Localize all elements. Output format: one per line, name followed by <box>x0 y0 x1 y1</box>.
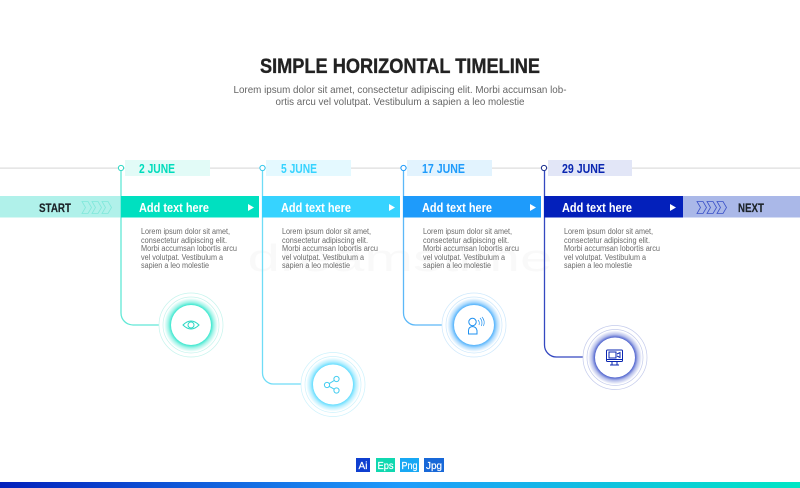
header bar: Add text here <box>139 200 209 215</box>
description: Lorem ipsum dolor sit amet, <box>282 227 371 236</box>
badge: Jpg: Jpg <box>426 461 442 472</box>
date tag <box>407 160 492 176</box>
node <box>260 165 265 171</box>
icon circle: monitor <box>583 326 647 390</box>
description <box>423 227 519 270</box>
next bar: NEXT <box>738 201 765 215</box>
subtitle <box>234 84 567 108</box>
header bar: Add text here <box>422 200 492 215</box>
subtitle: Lorem ipsum dolor sit amet, consectetur adipiscing elit. Morbi accumsan lob- <box>234 84 567 96</box>
description: sapien a leo molestie <box>423 261 491 270</box>
bottom gradient bar <box>0 482 800 488</box>
format badges <box>356 458 444 472</box>
header bar: Add text here <box>281 200 351 215</box>
description: Lorem ipsum dolor sit amet, <box>423 227 512 236</box>
description <box>564 227 660 270</box>
description: vel volutpat. Vestibulum a <box>282 253 364 262</box>
date tag <box>125 160 210 176</box>
description: sapien a leo molestie <box>564 261 632 270</box>
badge: Ai: Ai <box>359 461 367 472</box>
step 1: 2 June <box>118 160 259 357</box>
header bar <box>544 196 683 218</box>
icon circle: person signal <box>442 293 506 357</box>
start bar: START <box>39 201 72 215</box>
description: consectetur adipiscing elit. <box>423 236 509 245</box>
date tag: 29 JUNE <box>562 162 605 176</box>
badge: Png: Png <box>402 461 418 472</box>
subtitle: ortis arcu vel volutpat. Vestibulum a sapien a leo molestie <box>276 96 525 108</box>
next bar <box>683 196 800 218</box>
badge: Eps: Eps <box>378 461 394 472</box>
step 3: 17 June <box>401 160 541 357</box>
node <box>401 165 406 171</box>
header bar <box>403 196 541 218</box>
description: Lorem ipsum dolor sit amet, <box>564 227 653 236</box>
description: vel volutpat. Vestibulum a <box>141 253 223 262</box>
date tag: 2 JUNE <box>139 162 175 176</box>
start bar <box>0 196 121 218</box>
description: Morbi accumsan lobortis arcu <box>282 244 378 253</box>
description: vel volutpat. Vestibulum a <box>423 253 505 262</box>
description: consectetur adipiscing elit. <box>564 236 650 245</box>
description <box>282 227 378 270</box>
icon: start chevrons <box>82 202 112 214</box>
date tag <box>548 160 632 176</box>
step 4: 29 June <box>541 160 683 390</box>
connector line <box>404 168 455 325</box>
connector line <box>121 168 172 325</box>
description: Lorem ipsum dolor sit amet, <box>141 227 230 236</box>
description: vel volutpat. Vestibulum a <box>564 253 646 262</box>
description: sapien a leo molestie <box>141 261 209 270</box>
header bar <box>262 196 400 218</box>
icon circle: eye <box>159 293 223 357</box>
description: Morbi accumsan lobortis arcu <box>141 244 237 253</box>
timeline axis <box>0 168 800 169</box>
title: SIMPLE HORIZONTAL TIMELINE <box>260 55 540 78</box>
description: Morbi accumsan lobortis arcu <box>423 244 519 253</box>
connector line <box>544 168 596 357</box>
description <box>141 227 237 270</box>
date tag: 5 JUNE <box>281 162 317 176</box>
node <box>118 165 124 171</box>
description: sapien a leo molestie <box>282 261 350 270</box>
header bar <box>121 196 259 218</box>
description: Morbi accumsan lobortis arcu <box>564 244 660 253</box>
description: consectetur adipiscing elit. <box>141 236 227 245</box>
description: consectetur adipiscing elit. <box>282 236 368 245</box>
connector line <box>262 168 314 384</box>
icon: next chevrons <box>697 202 726 214</box>
date tag <box>266 160 351 176</box>
step 2: 5 June <box>260 160 400 416</box>
watermark: dreamstime <box>248 238 552 280</box>
icon circle: share <box>301 352 365 416</box>
date tag: 17 JUNE <box>422 162 465 176</box>
header bar: Add text here <box>562 200 632 215</box>
node <box>541 165 547 171</box>
